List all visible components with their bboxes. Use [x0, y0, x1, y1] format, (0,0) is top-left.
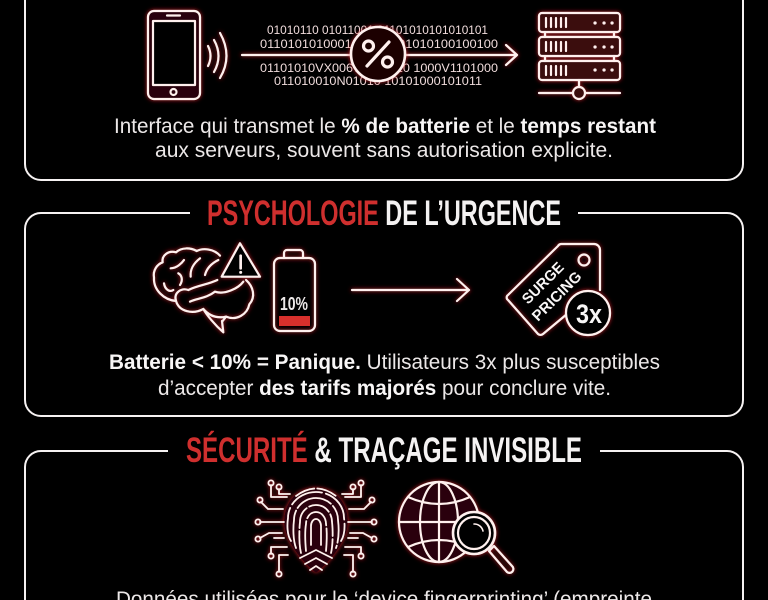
heading: PSYCHOLOGIE DE L’URGENCE: [207, 194, 561, 233]
icon: brain with warning: [154, 243, 260, 332]
icon: fingerprint circuit: [255, 480, 377, 577]
arrow: battery to surge pricing: [352, 279, 469, 301]
icon: globe with magnifier: [399, 482, 513, 573]
icon: percent badge: [351, 27, 405, 81]
text: panic description: d’accepter des tarifs majorés pour conclure vite.: [158, 376, 611, 400]
text: interface description: aux serveurs, souvent sans autorisation explicite.: [155, 138, 613, 162]
text: interface description: Interface qui transmet le % de batterie et le temps restant: [114, 114, 656, 138]
panel: psychologie de l'urgence: [25, 194, 743, 416]
panel: data interface: [25, 0, 743, 180]
heading: SÉCURITÉ & TRAÇAGE INVISIBLE: [186, 430, 582, 470]
icon: smartphone with signal waves: [148, 11, 226, 99]
binary data stream: 01101010VX006% 101010 1000V1101000: [260, 61, 498, 75]
icon: surge pricing tag: SURGE: [519, 259, 568, 308]
binary data stream: 01010110 01011001 01101010101010101: [267, 23, 488, 37]
text: panic description: [109, 350, 660, 400]
icon: surge pricing tag: 3x: [576, 299, 602, 329]
icon: battery 10 percent: 10%: [280, 294, 308, 314]
panel: sécurité et traçage invisible: [25, 430, 743, 600]
binary data stream: [260, 23, 498, 88]
icon: surge pricing tag: PRICING: [529, 268, 585, 325]
binary data stream: 0110101010001010 10101010100100100: [260, 37, 498, 51]
icon: server rack: [539, 13, 620, 99]
icon: battery 10 percent: [274, 250, 315, 331]
text: panic description: Batterie < 10% = Panique. Utilisateurs 3x plus susceptibles: [109, 350, 660, 374]
text: interface description: [114, 114, 656, 162]
icon: surge pricing tag: [507, 244, 610, 335]
arrow: phone to server: [242, 45, 517, 65]
binary data stream: 011010010N01010 10101000101011: [274, 74, 482, 88]
